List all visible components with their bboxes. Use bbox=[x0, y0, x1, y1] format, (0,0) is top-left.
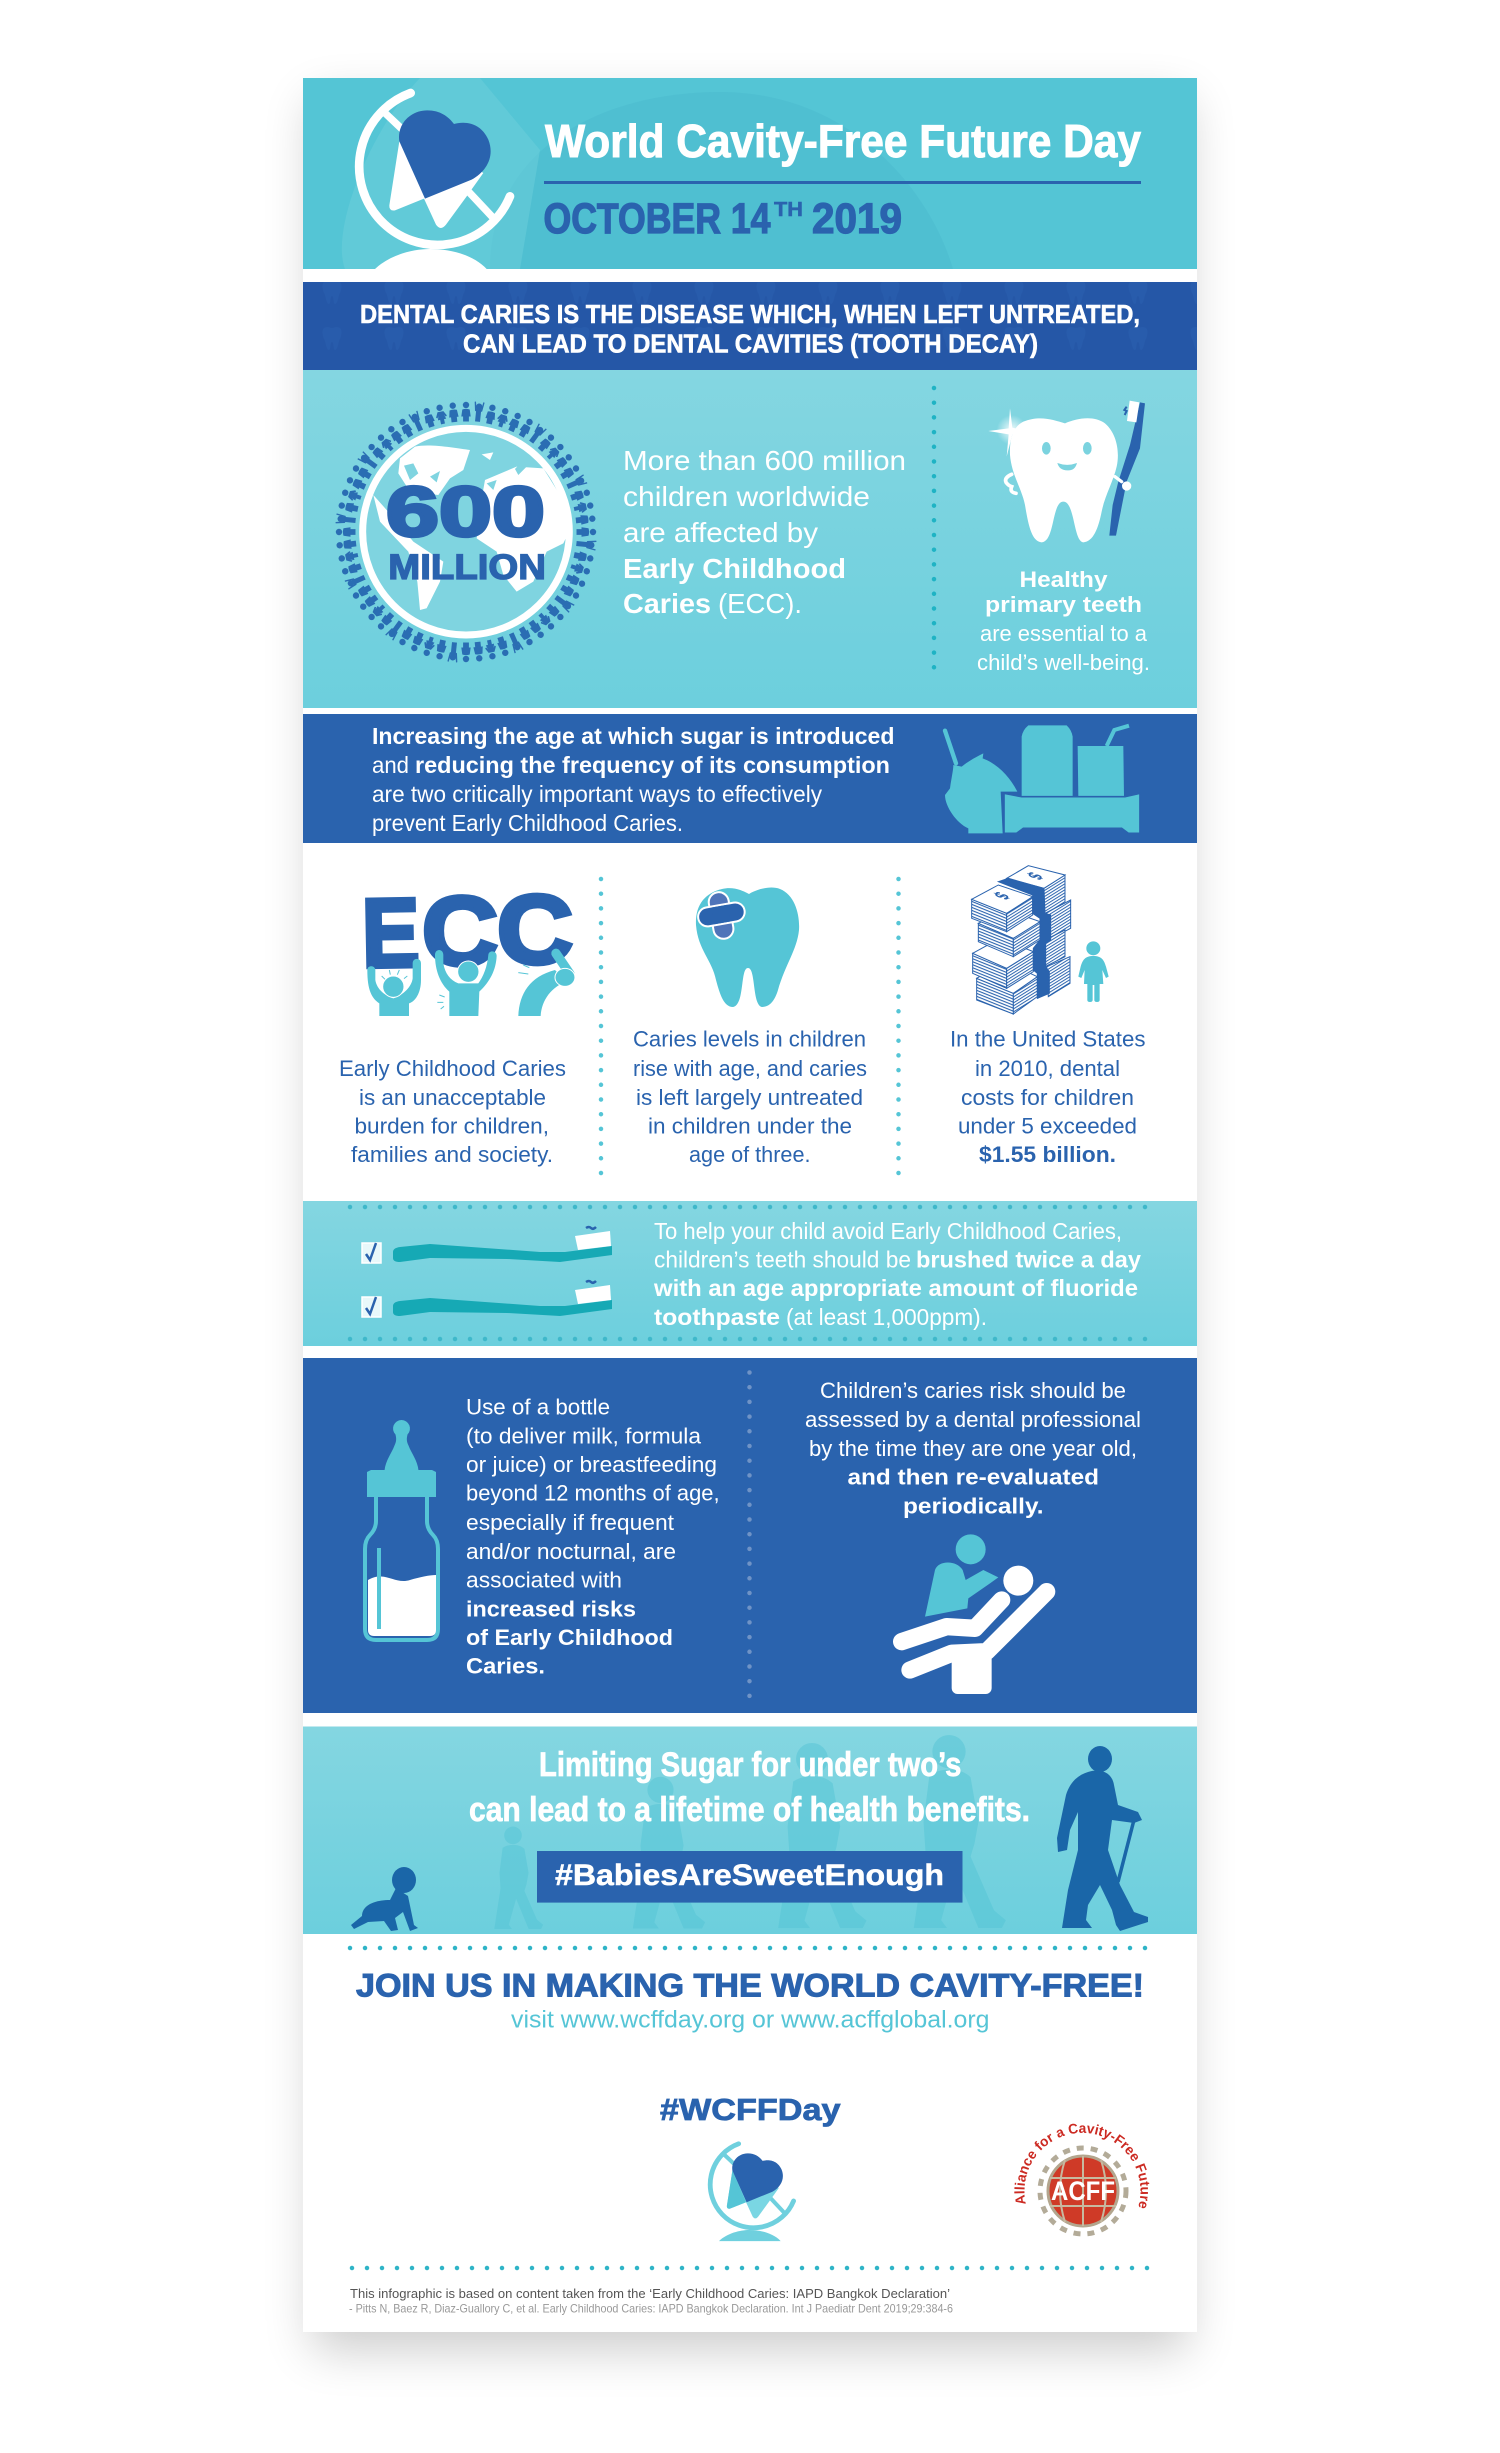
text block: dental costs: costs for children bbox=[961, 1085, 1134, 1110]
panel: reduce sugar bbox=[303, 714, 1197, 843]
panel: limiting sugar bbox=[303, 1726, 1197, 1934]
text block: 600 million: children worldwide bbox=[623, 481, 870, 512]
hashtag: #WCFFDay bbox=[660, 2092, 841, 2127]
icon: stacks of money beside a child: $ bbox=[1023, 869, 1045, 882]
heading: call to action: JOIN US IN MAKING THE WORLD CAVITY-FREE! bbox=[356, 1968, 1144, 2004]
text block: brushing advice: with an age appropriate amount of fluoride bbox=[653, 1275, 1138, 1301]
text block: bottle risks: Use of a bottle bbox=[466, 1395, 610, 1420]
panel: definition banner bbox=[303, 282, 1197, 370]
text block: sugar advice: prevent Early Childhood Caries. bbox=[372, 810, 683, 836]
footnote: source bbox=[349, 2286, 953, 2316]
icon: globe tooth heart logo bbox=[359, 93, 510, 269]
text block: 600 million: More than 600 million bbox=[623, 445, 906, 476]
text block: brushing advice: toothpaste bbox=[654, 1304, 780, 1330]
panel: definition banner: DENTAL CARIES IS THE DISEASE WHICH, WHEN LEFT UNTREATED, bbox=[360, 299, 1140, 329]
text block: ECC burden: is an unacceptable bbox=[359, 1085, 546, 1110]
icon: dentist and patient in chair bbox=[902, 1534, 1047, 1694]
date: TH bbox=[774, 199, 803, 221]
footnote: source: This infographic is based on content taken from the ‘Early Childhood Caries: IAPD Bangkok Declaration’ bbox=[350, 2286, 950, 2301]
text block: dental assessment bbox=[805, 1378, 1141, 1518]
text block: bottle risks: and/or nocturnal, are bbox=[466, 1539, 676, 1564]
text block: caries levels: rise with age, and caries bbox=[633, 1056, 867, 1081]
icon: world map: MILLION bbox=[388, 548, 546, 587]
icon: stacks of money beside a child: $ bbox=[990, 889, 1012, 902]
icon: world map: 600 bbox=[386, 472, 545, 551]
text block: ECC burden: Early Childhood Caries bbox=[339, 1056, 566, 1081]
text block: dental assessment: assessed by a dental professional bbox=[805, 1407, 1141, 1432]
icon: walking elderly man with cane bbox=[1057, 1746, 1148, 1931]
panel: definition banner: CAN LEAD TO DENTAL CAVITIES (TOOTH DECAY) bbox=[463, 328, 1038, 358]
text block: bottle risks: especially if frequent bbox=[466, 1510, 675, 1535]
hashtag button bbox=[537, 1851, 962, 1903]
text block: caries levels bbox=[633, 1026, 867, 1167]
text block: healthy primary teeth bbox=[977, 567, 1150, 675]
text block: 600 million: Caries bbox=[623, 588, 711, 619]
text block: 600 million: are affected by bbox=[623, 517, 818, 548]
text block: 600 million: Early Childhood bbox=[623, 553, 846, 584]
text block: ECC burden bbox=[339, 1056, 566, 1167]
panel: ECC facts bbox=[339, 866, 1146, 1174]
text block: bottle risks: associated with bbox=[466, 1568, 622, 1593]
icon: small globe tooth heart logo bbox=[710, 2144, 794, 2241]
text block: bottle risks: increased risks bbox=[466, 1596, 636, 1621]
panel: header bbox=[303, 78, 1197, 269]
text block: brushing advice: To help your child avoid Early Childhood Caries, bbox=[654, 1218, 1122, 1244]
text block: bottle risks: of Early Childhood bbox=[466, 1625, 673, 1650]
heading: lifetime benefits: can lead to a lifetime of health benefits. bbox=[469, 1791, 1030, 1829]
panel: brushing bbox=[303, 1201, 1197, 1346]
icon: ring of children around globe bbox=[324, 390, 608, 674]
date: 2019 bbox=[812, 195, 902, 243]
text block: healthy primary teeth: are essential to a bbox=[980, 621, 1148, 646]
icon: people lifting ECC letters: E bbox=[361, 878, 420, 988]
icon: ACFF logo: ACFF bbox=[1051, 2176, 1115, 2206]
text block: dental assessment: Children’s caries risk should be bbox=[820, 1378, 1126, 1403]
text block: healthy primary teeth: child’s well-being. bbox=[977, 650, 1150, 675]
text block: bottle risks: Caries. bbox=[466, 1654, 545, 1679]
panel: bottle and dental assessment bbox=[303, 1358, 1197, 1713]
text block: ECC burden: families and society. bbox=[351, 1142, 553, 1167]
text block: bottle risks: beyond 12 months of age, bbox=[466, 1481, 720, 1506]
text block: dental assessment: periodically. bbox=[903, 1493, 1044, 1518]
text block: dental costs bbox=[950, 1026, 1146, 1167]
text block: dental costs: in 2010, dental bbox=[975, 1056, 1120, 1081]
text block: caries levels: is left largely untreated bbox=[636, 1085, 863, 1110]
icon: people lifting ECC letters: C bbox=[422, 876, 498, 985]
heading: limiting sugar: Limiting Sugar for under two’s bbox=[539, 1746, 961, 1784]
infographic card bbox=[303, 78, 1197, 2332]
text block: dental costs: under 5 exceeded bbox=[958, 1114, 1137, 1138]
text block: brushing advice: children’s teeth should be bbox=[654, 1246, 911, 1272]
text block: healthy primary teeth: Healthy bbox=[1020, 567, 1108, 592]
text block: dental assessment: by the time they are one year old, bbox=[809, 1436, 1137, 1461]
date: OCTOBER 14 bbox=[544, 195, 771, 243]
text block: caries levels: age of three. bbox=[689, 1142, 810, 1167]
icon: toothbrush with check 1 bbox=[362, 1227, 612, 1263]
icon: people lifting ECC letters: C bbox=[497, 875, 573, 984]
text block: sugar advice bbox=[372, 723, 894, 836]
icon: baby bottle bbox=[365, 1420, 438, 1640]
text block: brushing advice: brushed twice a day bbox=[916, 1246, 1141, 1272]
text block: caries levels: in children under the bbox=[648, 1114, 852, 1138]
icon: faded life stage silhouettes bbox=[494, 1735, 1006, 1929]
icon: world map bbox=[363, 428, 571, 635]
text block: sugar advice: Increasing the age at which sugar is introduced bbox=[372, 723, 894, 749]
icon: smiling tooth with toothbrush bbox=[988, 401, 1145, 542]
icon: ACFF logo: Alliance for a Cavity-Free Future bbox=[1014, 2124, 1150, 2208]
hashtag button: #BabiesAreSweetEnough bbox=[555, 1859, 944, 1892]
text block: sugar advice: reducing the frequency of its consumption bbox=[415, 752, 890, 778]
text block: dental costs: In the United States bbox=[950, 1026, 1146, 1052]
text block: sugar advice: are two critically important ways to effectively bbox=[372, 781, 822, 807]
title: World Cavity-Free Future Day bbox=[545, 115, 1141, 167]
icon: people lifting ECC letters bbox=[361, 875, 575, 1016]
text block: dental assessment: and then re-evaluated bbox=[848, 1465, 1099, 1490]
text block: brushing advice bbox=[653, 1218, 1141, 1330]
text block: dental costs: $1.55 billion. bbox=[979, 1142, 1116, 1167]
text block: bottle risks: or juice) or breastfeeding bbox=[466, 1452, 717, 1477]
card shadow bbox=[312, 100, 1188, 2350]
footnote: source: - Pitts N, Baez R, Diaz-Guallory C, et al. Early Childhood Caries: IAPD Bangkok Declaration. Int J Paediatr Dent 2019;29:384-6 bbox=[349, 2302, 953, 2316]
icon: stacks of money beside a child bbox=[972, 866, 1109, 1014]
text block: bottle risks bbox=[466, 1395, 720, 1679]
text block: caries levels: Caries levels in children bbox=[633, 1026, 866, 1052]
website links: visit www.wcffday.org or www.acffglobal.org bbox=[511, 2007, 990, 2034]
text block: sugar advice: and bbox=[372, 752, 409, 778]
icon: toothbrush with check 2 bbox=[362, 1281, 612, 1317]
icon: sugary snacks bbox=[945, 725, 1140, 833]
text block: 600 million bbox=[623, 445, 906, 619]
text block: bottle risks: (to deliver milk, formula bbox=[466, 1423, 701, 1448]
text block: 600 million: (ECC). bbox=[718, 588, 802, 619]
icon: crawling baby bbox=[351, 1867, 418, 1931]
icon: tooth with bandage bbox=[694, 888, 799, 1007]
text block: brushing advice: (at least 1,000ppm). bbox=[786, 1304, 987, 1330]
panel: 600 million children bbox=[303, 370, 1197, 708]
text block: healthy primary teeth: primary teeth bbox=[985, 592, 1142, 617]
text block: ECC burden: burden for children, bbox=[354, 1114, 549, 1138]
